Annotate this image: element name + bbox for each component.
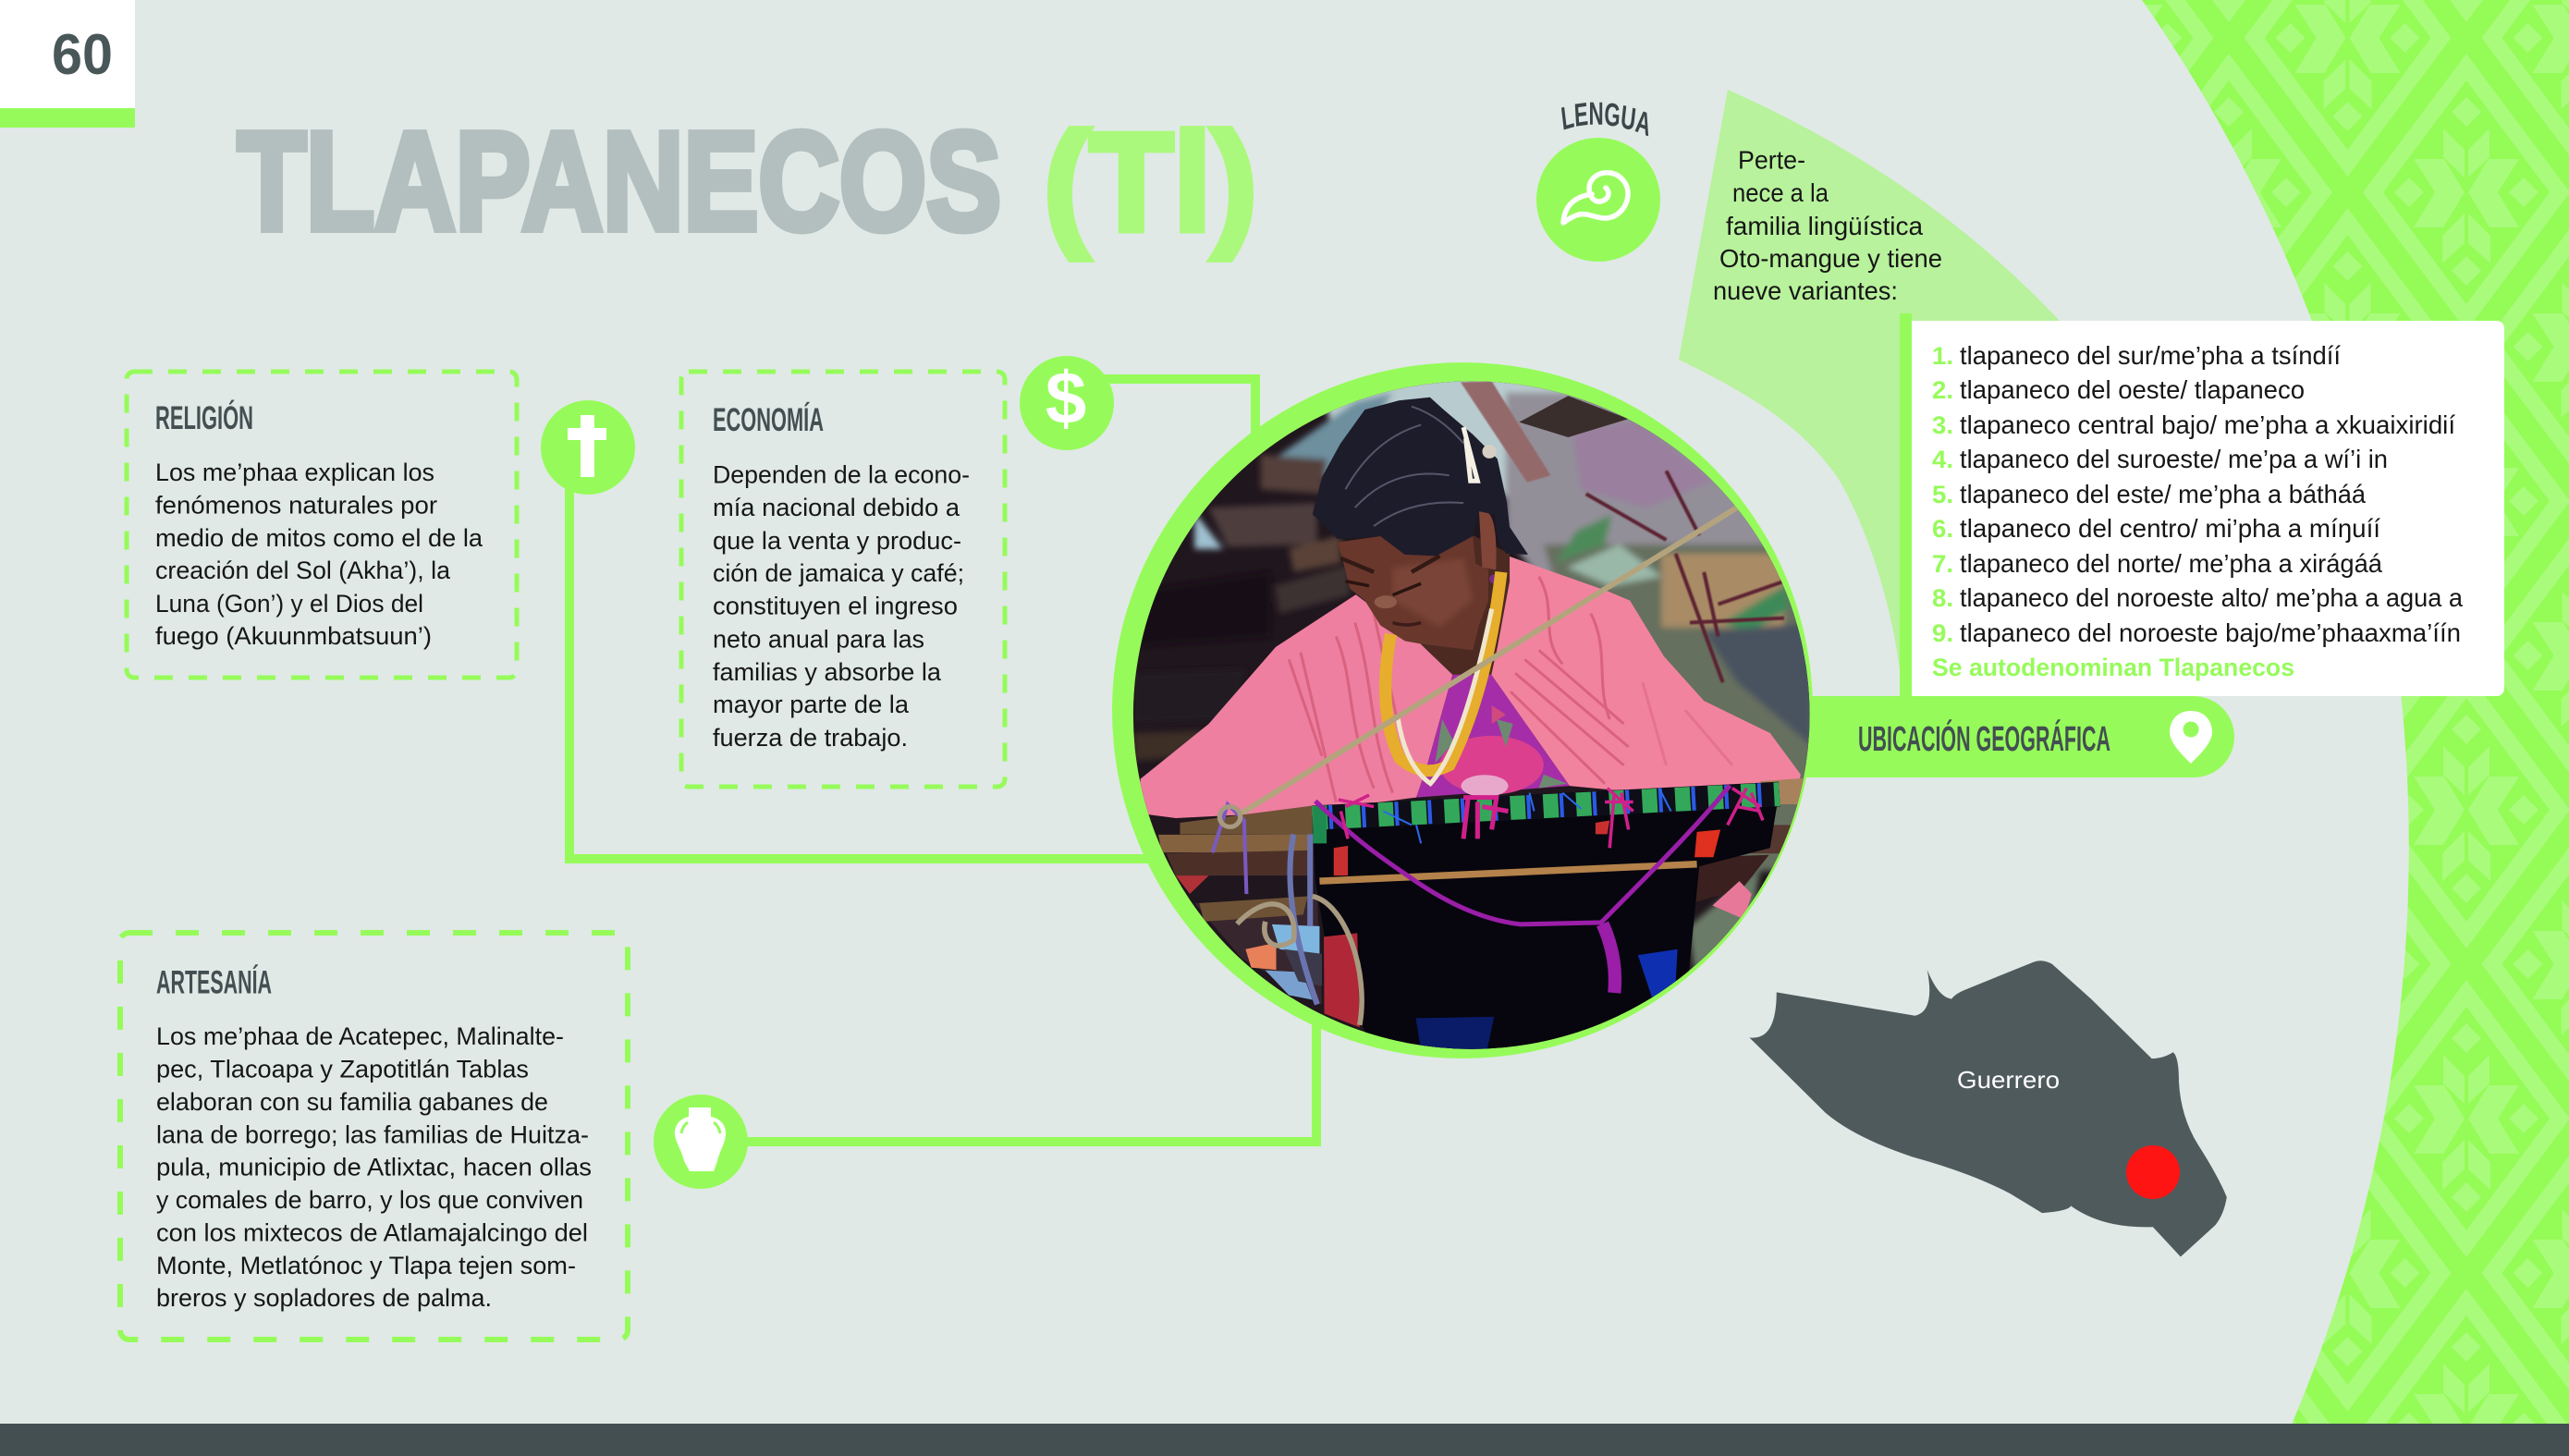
text: crafts body: [156, 1022, 592, 1312]
shirt: [1416, 653, 1570, 798]
rope: [1237, 508, 1737, 815]
text: religion body: creación del Sol (Akha’), la: [155, 557, 451, 584]
text: religion body: Los me’phaa explican los: [155, 459, 434, 486]
heading: lengua: LENGUA: [1560, 102, 1649, 137]
photo: woman weaving on a backstrap loom: [1133, 381, 1810, 1049]
necklace: [1386, 572, 1501, 771]
text: crafts body: lana de borrego; las familias de Huitza-: [156, 1120, 589, 1148]
connector: crafts: [740, 1017, 1316, 1142]
panel: language variants: [1900, 313, 2504, 696]
icon: dollar: $: [1046, 357, 1086, 439]
text: religion body: [155, 459, 483, 650]
icon: clay jar: [654, 1095, 748, 1189]
loom sticks: [1180, 806, 1313, 834]
hair: [1313, 398, 1528, 556]
list variants: [1960, 341, 2463, 647]
list variants: tlapaneco del noroeste alto/ me’pha a agua a: [1960, 583, 2463, 612]
text: crafts body: y comales de barro, y los que conviven: [156, 1186, 583, 1214]
list variants: tlapaneco central bajo/ me’pha a xkuaixiridií: [1960, 410, 2455, 439]
list variants: tlapaneco del suroeste/ me’pa a wí’i in: [1960, 445, 2388, 473]
list numbers: 3.: [1932, 411, 1953, 439]
text: economy body: mayor parte de la: [713, 691, 910, 718]
list variants: tlapaneco del oeste/ tlapaneco: [1960, 375, 2305, 404]
location bar: [1756, 696, 2234, 777]
text: economy body: Dependen de la econo-: [713, 460, 970, 488]
list numbers: 8.: [1932, 584, 1953, 612]
list numbers: 1.: [1932, 342, 1953, 370]
list variants: tlapaneco del centro/ mi’pha a míŋuíí: [1960, 514, 2380, 543]
language fan shape: [1679, 90, 2071, 703]
text: language intro: nece a la: [1732, 178, 1829, 207]
text: religion body: fuego (Akuunmbatsuun’): [155, 622, 432, 650]
text: language intro: Oto-mangue y tiene: [1719, 244, 1942, 273]
location bar: UBICACIÓN GEOGRÁFICA: [1858, 718, 2110, 759]
list numbers: 2.: [1932, 376, 1953, 404]
text: economy body: ción de jamaica y café;: [713, 559, 964, 587]
text: economy body: neto anual para las: [713, 625, 924, 653]
list variants: tlapaneco del noroeste bajo/me’phaaxma’íín: [1960, 618, 2461, 647]
text: crafts body: Los me’phaa de Acatepec, Malinalte-: [156, 1022, 564, 1050]
text: crafts body: Monte, Metlatónoc y Tlapa tejen som-: [156, 1252, 576, 1279]
map: Guerrero: [1749, 960, 2227, 1257]
connector: religion: [569, 481, 1156, 859]
panel: religion: [127, 372, 517, 678]
text: crafts body: elaboran con su familia gabanes de: [156, 1088, 548, 1116]
list numbers: [1932, 342, 1953, 647]
text: language intro: familia lingüística: [1726, 212, 1923, 240]
heading: crafts: ARTESANÍA: [156, 963, 272, 1000]
connector: economy: [1100, 379, 1255, 444]
panel: economy: [681, 372, 1005, 787]
title: (Tl): [1044, 104, 1257, 260]
text: economy body: familias y absorbe la: [713, 658, 942, 686]
heading: economy: ECONOMÍA: [713, 401, 824, 438]
page number tab: 60: [52, 23, 113, 87]
text: economy body: [713, 460, 970, 752]
text: crafts body: breros y sopladores de palma.: [156, 1284, 492, 1312]
text: crafts body: con los mixtecos de Atlamajalcingo del: [156, 1218, 588, 1246]
text: religion body: medio de mitos como el de la: [155, 524, 483, 552]
text: language intro: nueve variantes:: [1713, 276, 1898, 305]
list numbers: 7.: [1932, 550, 1953, 578]
text: language intro: [1713, 146, 1942, 305]
hand and sleeve: [1695, 854, 1769, 902]
list variants: tlapaneco del sur/me’pha a tsíndíí: [1960, 341, 2341, 370]
icon: language swirl: [1536, 138, 1660, 262]
list variants: tlapaneco del este/ me’pha a bátháá: [1960, 480, 2366, 508]
face: [1338, 536, 1488, 650]
heading: religion: RELIGIÓN: [155, 399, 253, 436]
textile: [1313, 790, 1780, 1050]
text: religion body: fenómenos naturales por: [155, 492, 437, 520]
text: economy body: fuerza de trabajo.: [713, 724, 908, 752]
map marker: [2126, 1145, 2180, 1199]
lower left details: [1176, 875, 1209, 894]
icon: location pin: [2170, 711, 2212, 764]
cardigan: [1141, 594, 1452, 818]
list numbers: 4.: [1932, 446, 1953, 473]
text: economy body: constituyen el ingreso: [713, 592, 958, 619]
text: religion body: Luna (Gon’) y el Dios del: [155, 590, 423, 618]
neck: [1421, 535, 1510, 675]
icon: cross: [541, 400, 635, 495]
map label: Guerrero: [1957, 1066, 2060, 1094]
text: crafts body: pec, Tlacoapa y Zapotitlán Tablas: [156, 1056, 529, 1083]
list numbers: 5.: [1932, 481, 1953, 508]
text: crafts body: pula, municipio de Atlixtac, hacen ollas: [156, 1154, 592, 1181]
text: economy body: mía nacional debido a: [713, 494, 960, 521]
text: economy body: que la venta y produc-: [713, 527, 961, 555]
list numbers: 6.: [1932, 515, 1953, 543]
footer bar: [0, 1424, 2569, 1456]
list variants: tlapaneco del norte/ me’pha a xirágáá: [1960, 549, 2382, 578]
photo ring: [1112, 362, 1813, 1058]
note: self-designation: Se autodenominan Tlapanecos: [1932, 654, 2294, 681]
text: language intro: Perte-: [1738, 146, 1805, 174]
page number tab: [0, 0, 135, 128]
list numbers: 9.: [1932, 619, 1953, 647]
icon: dollar: [1020, 356, 1114, 450]
title: TLAPANECOS: [238, 103, 1001, 259]
panel: crafts: [120, 933, 628, 1340]
